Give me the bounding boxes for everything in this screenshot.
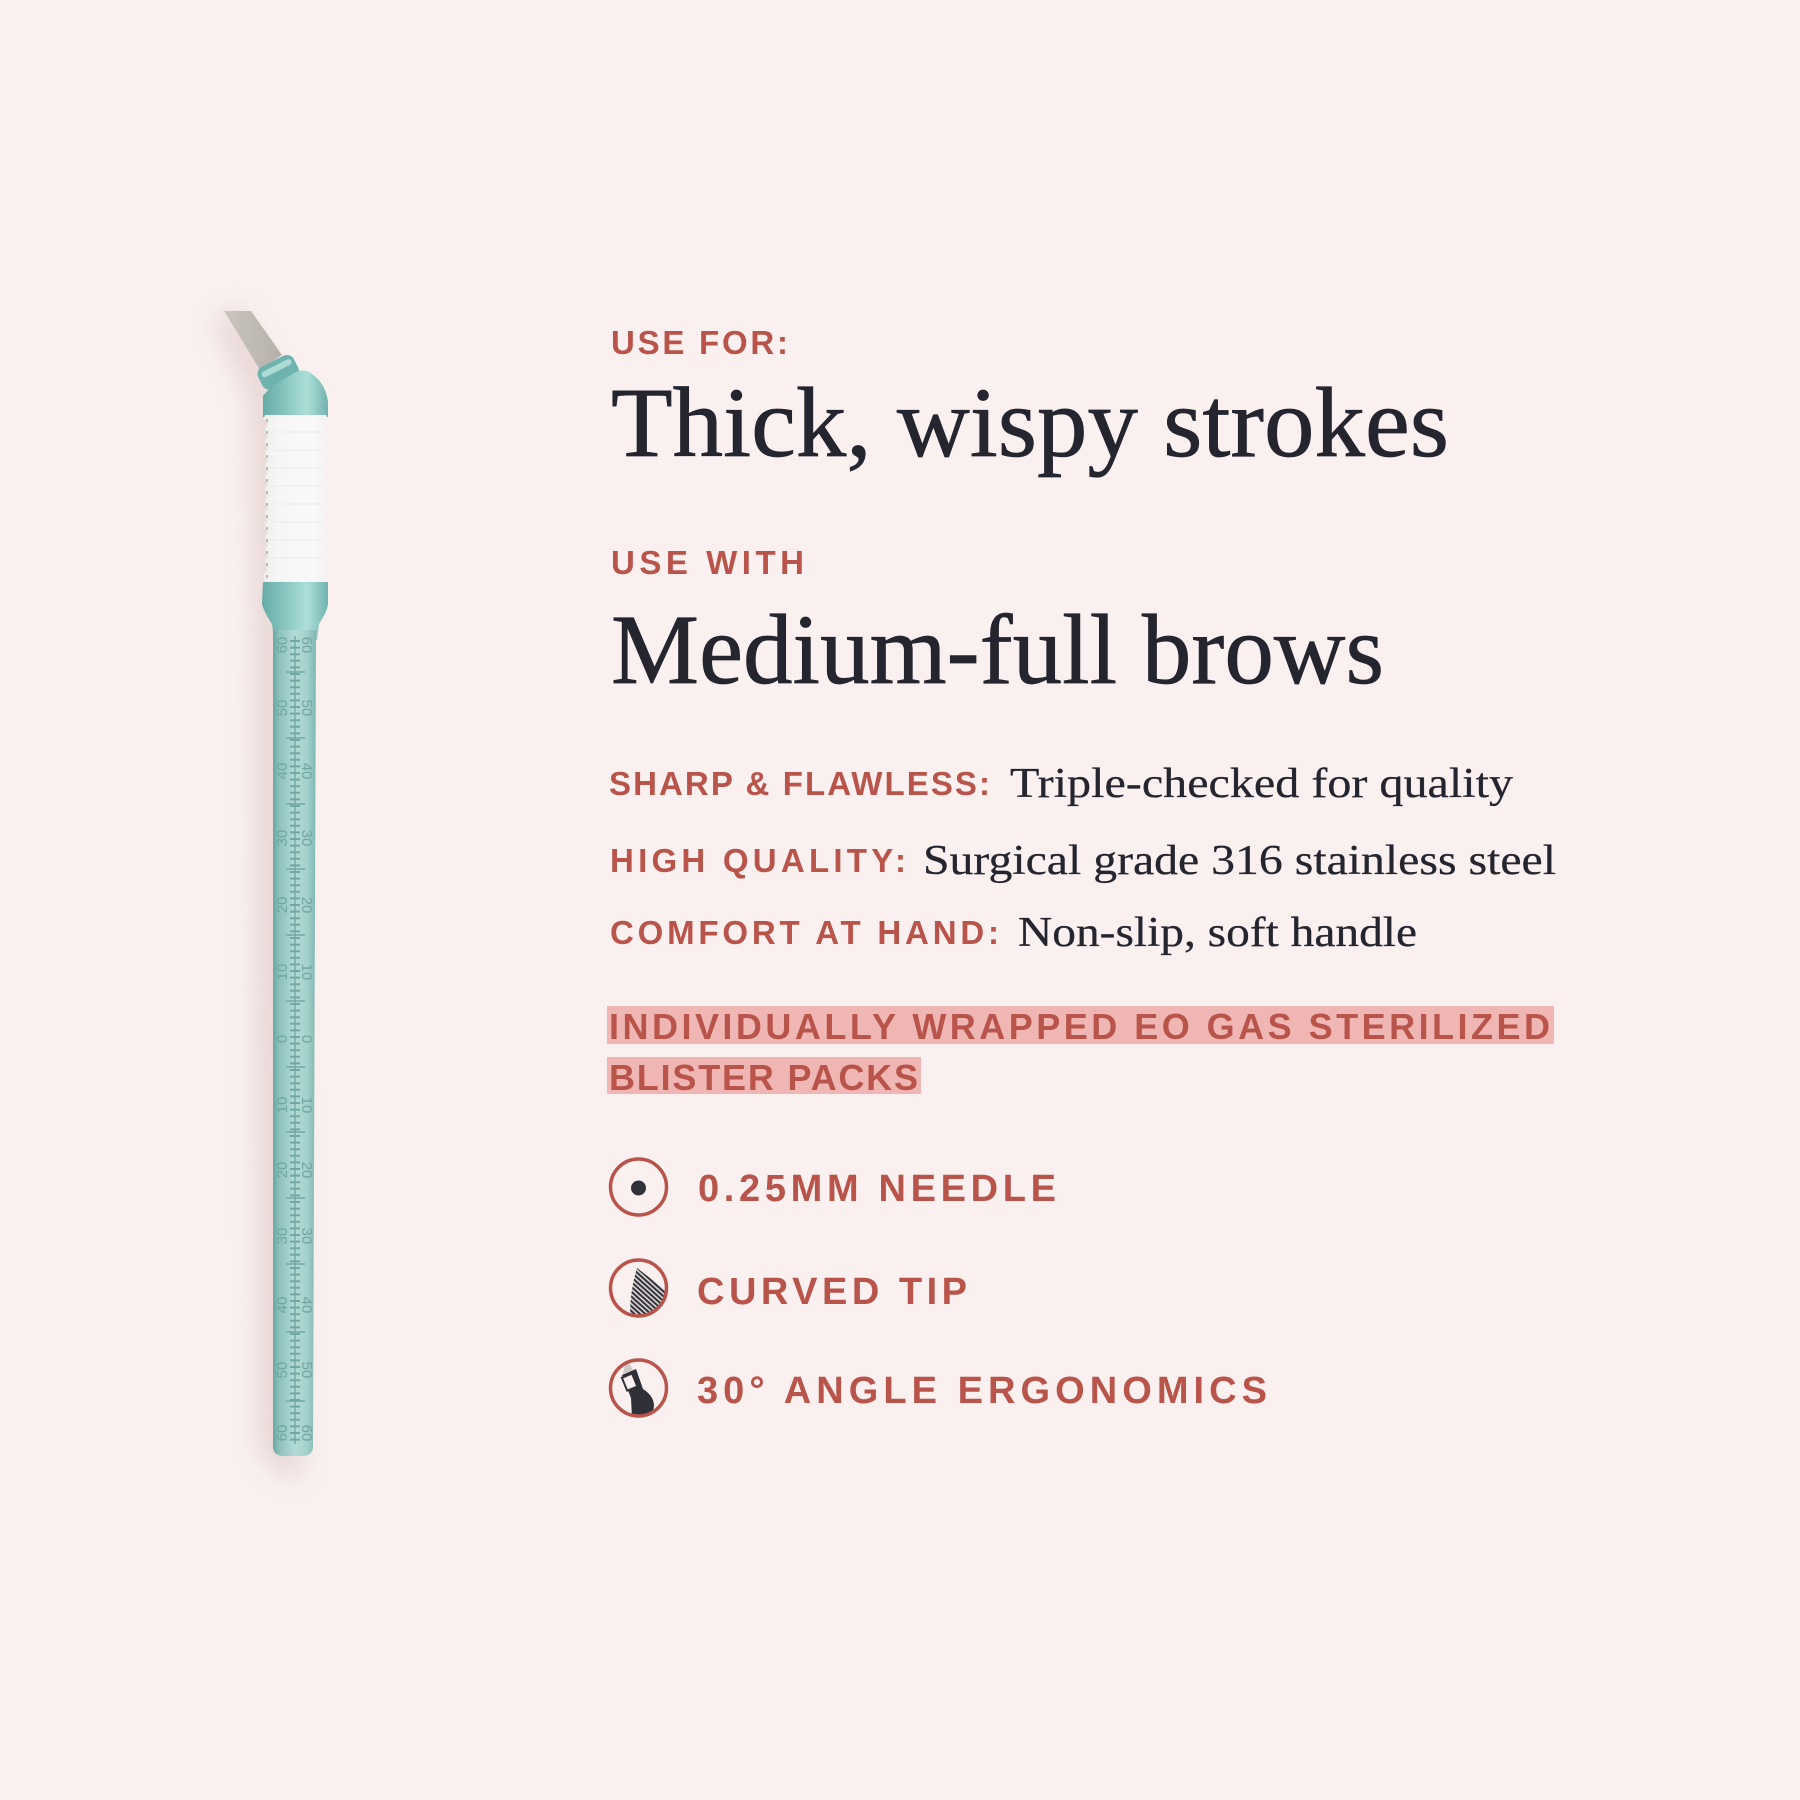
spec: curved tip: CURVED TIP bbox=[697, 1271, 967, 1313]
spec: angle ergonomics: 30° ANGLE ERGONOMICS bbox=[697, 1370, 1267, 1412]
ruler numbers: 40 bbox=[274, 763, 291, 779]
spec: needle size bbox=[610, 1159, 1056, 1215]
ruler numbers: 0 bbox=[274, 1035, 291, 1043]
ruler numbers: 10 bbox=[274, 964, 291, 980]
feature: high quality: Surgical grade 316 stainless steel bbox=[923, 838, 1556, 884]
feature: high quality: HIGH QUALITY: bbox=[610, 842, 906, 879]
ruler numbers: 10 bbox=[298, 1097, 315, 1113]
pen illustration bbox=[215, 310, 328, 1476]
icon: curved tip blade bbox=[610, 1260, 668, 1320]
highlighted note: sterilized blister packs: BLISTER PACKS bbox=[609, 1057, 918, 1098]
label: use with: USE WITH bbox=[611, 544, 804, 581]
spec: needle size: 0.25MM NEEDLE bbox=[698, 1168, 1056, 1210]
feature: sharp and flawless: SHARP & FLAWLESS: bbox=[609, 765, 990, 802]
icon: angled handle bbox=[610, 1360, 666, 1418]
highlighted note: sterilized blister packs bbox=[607, 1006, 1554, 1098]
ruler numbers: 20 bbox=[298, 1162, 315, 1178]
feature: sharp and flawless: Triple-checked for quality bbox=[1010, 761, 1513, 807]
feature: comfort at hand bbox=[610, 910, 1417, 956]
ruler numbers: 60 bbox=[274, 637, 291, 653]
ruler numbers: 60 bbox=[298, 637, 315, 653]
feature: sharp and flawless bbox=[609, 761, 1513, 807]
ruler numbers: 20 bbox=[274, 1162, 291, 1178]
ruler numbers: 50 bbox=[298, 700, 315, 716]
ruler numbers: 30 bbox=[298, 830, 315, 846]
pen shadow bbox=[215, 310, 300, 1476]
feature: high quality bbox=[610, 838, 1556, 884]
neck bbox=[255, 352, 302, 393]
blade bbox=[224, 311, 282, 370]
infographic canvas bbox=[216, 311, 1556, 1477]
highlighted note: sterilized blister packs: INDIVIDUALLY WRAPPED EO GAS STERILIZED bbox=[609, 1006, 1550, 1047]
ruler numbers bbox=[274, 637, 315, 1441]
ruler numbers: 50 bbox=[274, 700, 291, 716]
icon: needle dot bbox=[610, 1159, 666, 1215]
shaft bbox=[273, 630, 316, 1456]
ruler numbers: 60 bbox=[274, 1425, 291, 1441]
feature: comfort at hand: COMFORT AT HAND: bbox=[610, 914, 999, 951]
ruler numbers: 30 bbox=[274, 830, 291, 846]
ruler ticks bbox=[286, 636, 305, 1444]
ruler numbers: 40 bbox=[274, 1297, 291, 1313]
ruler numbers: 40 bbox=[298, 1297, 315, 1313]
top cap bbox=[263, 370, 328, 417]
ruler numbers: 20 bbox=[298, 897, 315, 913]
white grip bbox=[264, 415, 327, 582]
ruler numbers: 20 bbox=[274, 897, 291, 913]
ruler numbers: 60 bbox=[298, 1425, 315, 1441]
feature: comfort at hand: Non-slip, soft handle bbox=[1018, 910, 1417, 956]
ruler numbers: 0 bbox=[298, 1035, 315, 1043]
heading: medium-full brows: Medium-full brows bbox=[611, 594, 1384, 705]
ruler numbers: 50 bbox=[274, 1362, 291, 1378]
spec: curved tip bbox=[610, 1260, 967, 1320]
lower collar bbox=[262, 582, 328, 640]
ruler numbers: 50 bbox=[298, 1362, 315, 1378]
ruler numbers: 10 bbox=[298, 964, 315, 980]
ruler numbers: 30 bbox=[298, 1228, 315, 1244]
ruler numbers: 10 bbox=[274, 1097, 291, 1113]
label: use for: USE FOR: bbox=[611, 324, 788, 361]
ruler numbers: 30 bbox=[274, 1228, 291, 1244]
spec: angle ergonomics bbox=[610, 1360, 1267, 1418]
ruler numbers: 40 bbox=[298, 763, 315, 779]
heading: thick, wispy strokes: Thick, wispy strokes bbox=[611, 367, 1449, 478]
